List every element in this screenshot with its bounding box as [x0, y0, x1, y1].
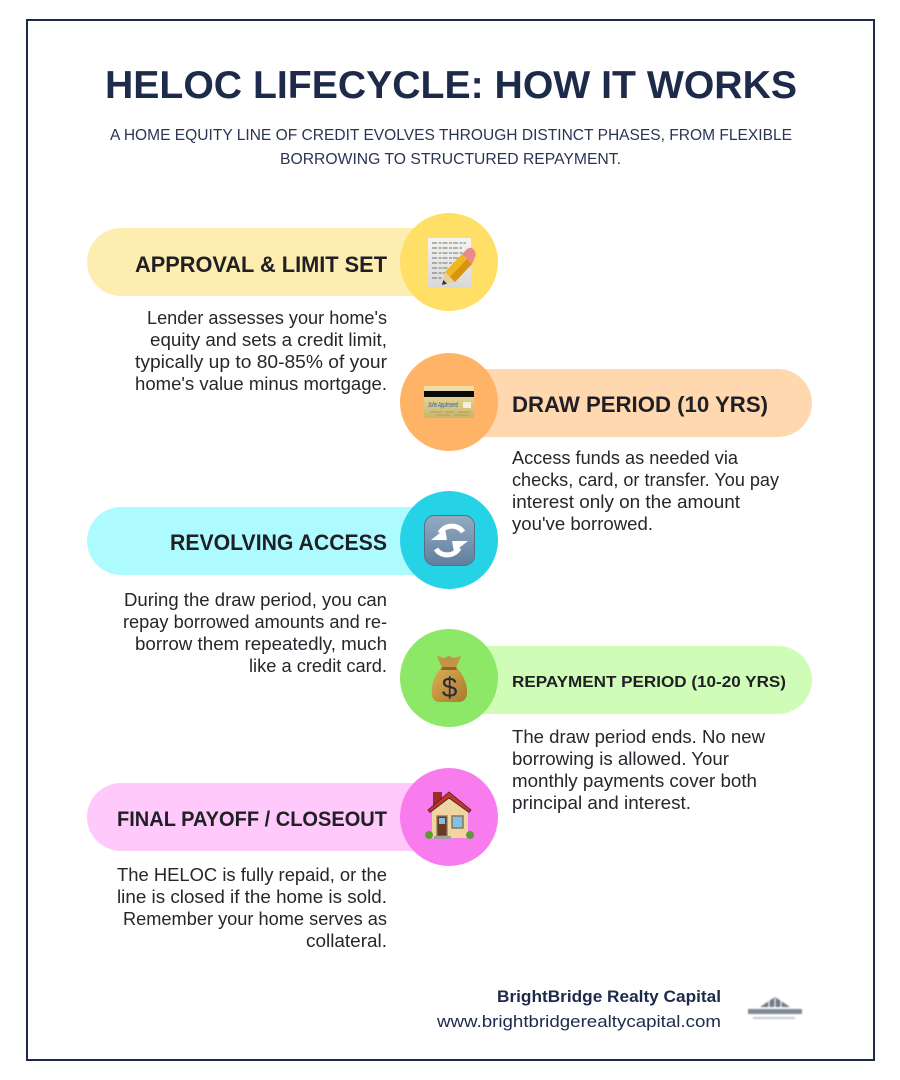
panel: draw period [400, 353, 812, 534]
revolving heading: REVOLVING ACCESS [170, 530, 387, 555]
subtitle: BORROWING TO STRUCTURED REPAYMENT. [280, 151, 621, 168]
approval description: home's value minus mortgage. [135, 374, 387, 394]
footer company name: BrightBridge Realty Capital [497, 987, 721, 1006]
approval description: equity and sets a credit limit, [150, 330, 387, 350]
title: HELOC LIFECYCLE: HOW IT WORKS [105, 64, 797, 107]
draw pill [449, 369, 812, 437]
draw circle [400, 353, 498, 451]
revolving description: repay borrowed amounts and re- [123, 612, 387, 632]
final payoff circle [400, 768, 498, 866]
revolving description [123, 590, 387, 676]
approval heading: APPROVAL & LIMIT SET [135, 252, 388, 277]
panel: final payoff [87, 768, 498, 951]
draw description: you've borrowed. [512, 514, 653, 534]
approval description: typically up to 80-85% of your [135, 352, 387, 372]
revolving description: borrow them repeatedly, much [135, 634, 387, 654]
repayment pill [449, 646, 812, 714]
final payoff description: line is closed if the home is sold. [117, 887, 387, 907]
icon: credit card [424, 386, 474, 418]
final payoff description [117, 865, 387, 951]
approval circle [400, 213, 498, 311]
icon: refresh arrows [424, 516, 474, 566]
final payoff heading: FINAL PAYOFF / CLOSEOUT [117, 808, 387, 831]
icon: memo and pencil [428, 238, 476, 288]
icon: company logo [748, 997, 802, 1019]
draw heading: DRAW PERIOD (10 YRS) [512, 392, 768, 417]
approval description [135, 308, 387, 394]
draw description: Access funds as needed via [512, 448, 739, 468]
final payoff description: collateral. [306, 931, 387, 951]
repayment description: borrowing is allowed. Your [512, 749, 729, 769]
approval description: Lender assesses your home's [147, 308, 387, 328]
draw description: checks, card, or transfer. You pay [512, 470, 779, 490]
final payoff description: The HELOC is fully repaid, or the [117, 865, 387, 885]
subtitle: A HOME EQUITY LINE OF CREDIT EVOLVES THROUGH DISTINCT PHASES, FROM FLEXIBLE [110, 127, 792, 144]
repayment description [512, 727, 766, 813]
panel: repayment period [400, 629, 812, 813]
icon: money bag [432, 656, 467, 703]
revolving circle [400, 491, 498, 589]
approval pill [87, 228, 450, 296]
panel: revolving access [87, 491, 498, 676]
repayment heading: REPAYMENT PERIOD (10-20 YRS) [512, 674, 786, 691]
icon: money bag: $ [442, 672, 458, 703]
repayment description: monthly payments cover both [512, 771, 757, 791]
repayment description: The draw period ends. No new [512, 727, 766, 747]
icon: house [425, 792, 474, 839]
repayment description: principal and interest. [512, 793, 691, 813]
draw description [512, 448, 779, 534]
final payoff pill [87, 783, 450, 851]
footer website: www.brightbridgerealtycapital.com [436, 1012, 721, 1031]
revolving description: During the draw period, you can [124, 590, 387, 610]
draw description: interest only on the amount [512, 492, 740, 512]
final payoff description: Remember your home serves as [123, 909, 387, 929]
revolving pill [87, 507, 450, 575]
revolving description: like a credit card. [249, 656, 387, 676]
repayment circle [400, 629, 498, 727]
panel: approval and limit set [87, 213, 498, 394]
subtitle [110, 127, 792, 168]
icon: credit card: John Appleseed [427, 402, 459, 409]
